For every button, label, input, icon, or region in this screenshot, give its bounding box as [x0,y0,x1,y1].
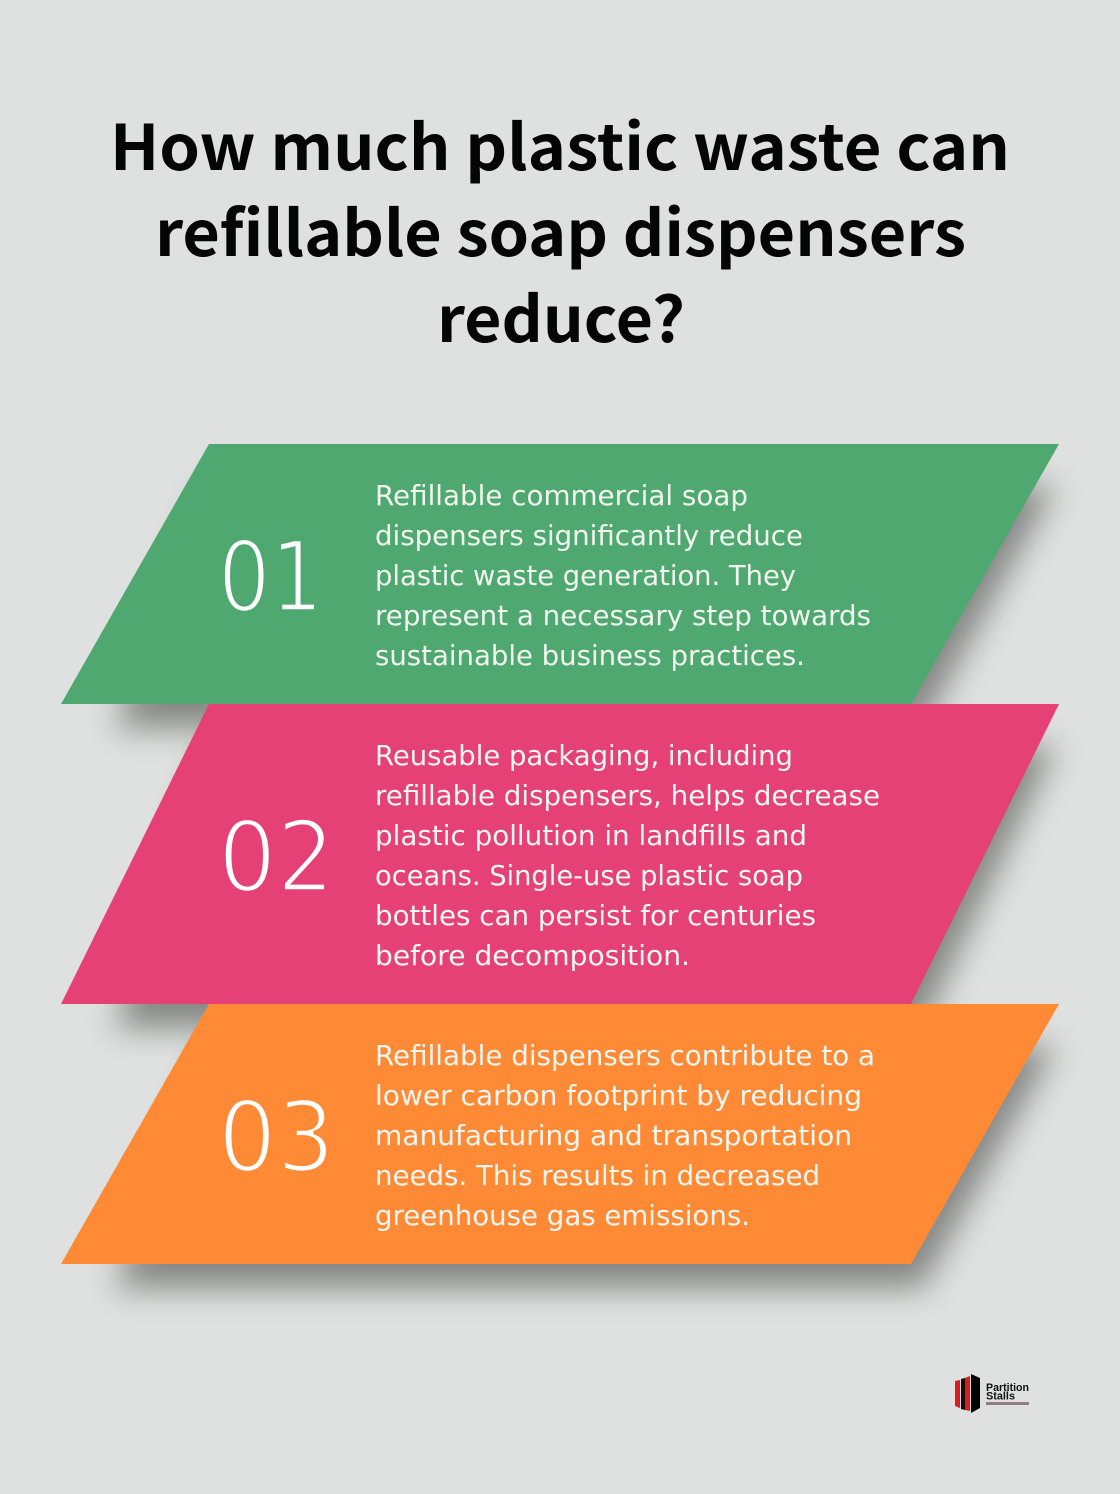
text block 02: Reusable packaging, including [375,740,793,772]
logo wordmark: Stalls [986,1390,1015,1402]
number 01: 01 [218,521,323,635]
text block 02: before decomposition. [375,940,690,972]
text block 03: manufacturing and transportation [375,1120,852,1152]
title [110,98,1010,361]
text block 01: plastic waste generation. They [375,560,796,592]
text block 01: represent a necessary step towards [375,600,871,632]
text block 02 [375,740,880,972]
logo: Partition Stalls [955,1374,1029,1413]
text block 03: lower carbon footprint by reducing [375,1080,862,1112]
number 03: 03 [218,1081,335,1195]
logo wordmark [986,1382,1029,1405]
icon: logo bars [955,1374,980,1413]
text block 03: needs. This results in decreased [375,1160,820,1192]
text block 02: bottles can persist for centuries [375,900,816,932]
panel: step 01 [61,444,1059,728]
text block 03 [375,1040,875,1232]
text block 02: refillable dispensers, helps decrease [375,780,880,812]
title: reduce? [437,270,685,361]
text block 02: plastic pollution in landfills and [375,820,807,852]
panel: step 03 [61,1004,1059,1288]
text block 01: Refillable commercial soap [375,480,748,512]
text block 01 [375,480,871,672]
title: How much plastic waste can [110,98,1010,189]
text block 02: oceans. Single-use plastic soap [375,860,803,892]
title: refillable soap dispensers [155,184,966,275]
text block 03: Refillable dispensers contribute to a [375,1040,875,1072]
number 02: 02 [218,801,335,915]
text block 01: sustainable business practices. [375,640,805,672]
logo wordmark: Partition [986,1382,1029,1394]
text block 03: greenhouse gas emissions. [375,1200,750,1232]
panel: step 02 [61,704,1059,1028]
text block 01: dispensers significantly reduce [375,520,803,552]
